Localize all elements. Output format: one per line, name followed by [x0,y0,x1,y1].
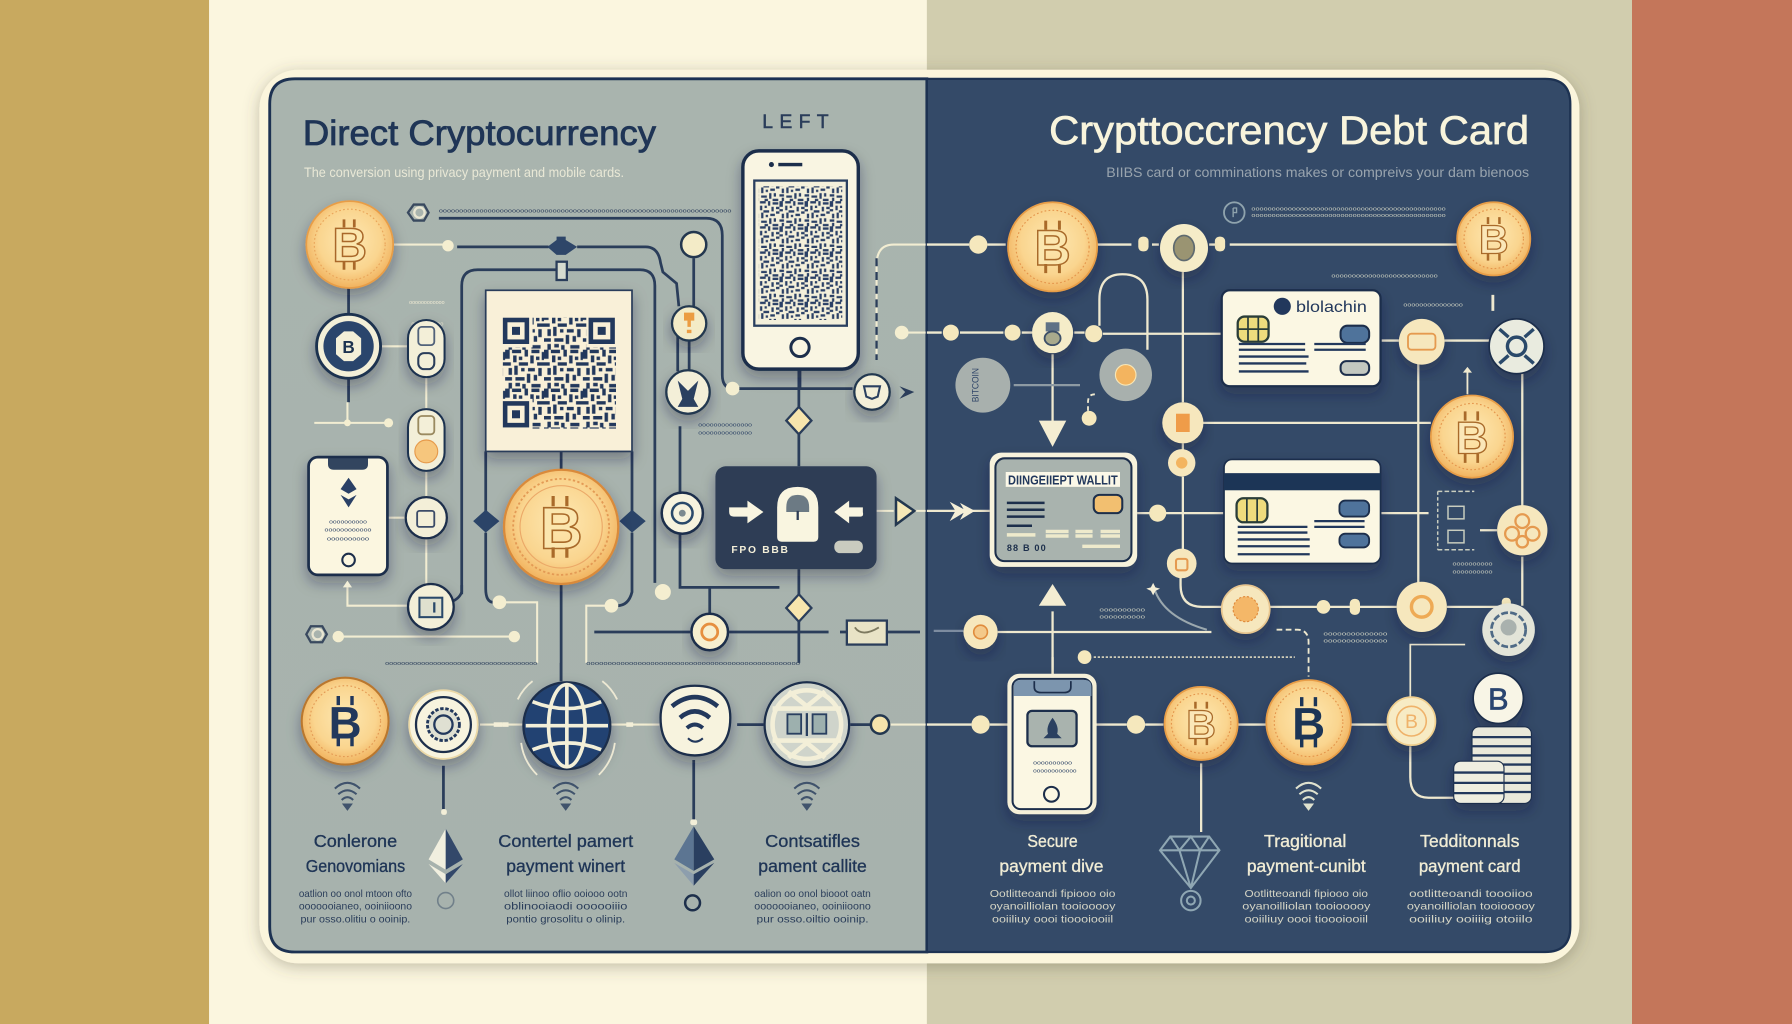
node: key circle [672,306,706,341]
connector lines left [349,218,920,821]
coin: top left bitcoin [306,201,393,288]
caption: secure: payment dive [999,856,1103,876]
caption: secure: ooiiliuy oooi tioooiooiil [992,914,1113,925]
note text near token [409,300,445,328]
node: coin stack icon [1032,312,1073,353]
coin: bottom left [302,678,389,765]
icon: ring label [1224,202,1245,223]
caption: column one: oatlion oo onol mtoon ofto [299,889,412,900]
caption: secure: Secure [1027,831,1078,851]
node: grey globe [1482,603,1535,656]
caption: column two: pontio grosolitu o olinip. [506,914,625,925]
icon: ethereum left [429,829,463,883]
caption: column one: pur osso.olitiu o ooinip. [301,914,410,925]
caption: column one: Genovomians [306,856,405,876]
caption: column three: oalion oo onol biooot oatn [754,889,871,900]
subtitle left: The conversion using privacy payment and mobile cards. [304,165,624,181]
caption: column three: pur osso.oiltio ooinip. [757,914,869,925]
gem node [547,237,577,255]
card: blockchain: blolachin [1296,299,1367,316]
coin: right mid [1431,395,1513,478]
arrow up into wallet [1039,584,1066,606]
coin: right top large [1008,202,1097,291]
arrow down into wallet [1039,421,1066,447]
dashed chip bracket [1438,491,1474,550]
coin: right bottom dark B [1266,680,1351,765]
small rings [438,893,700,910]
node: grey vertical label [955,358,1010,413]
small receipt box [847,621,887,645]
caption: column three: pament callite [758,856,867,876]
icon: navy token [317,314,381,378]
node: ring [662,493,703,534]
wifi icons left [335,783,819,809]
phone small left: oooooooooooo [325,527,372,533]
card: plain debit [1224,459,1381,563]
connector lines right [927,245,1522,832]
stem caps [441,809,697,825]
icon: navy token: B [342,337,355,357]
caption: column one [299,831,412,925]
caption: traditional card: Tedditonnals [1420,831,1519,851]
node: small coin [1168,449,1195,477]
icon: pill lower [408,409,445,471]
QR code large [486,290,632,451]
micro captions right: oooooooooooooo [1323,631,1387,637]
node: three rings [1497,505,1547,555]
micro note by lock card: oooooooooooooo [698,422,752,428]
coin: right top large: B [1034,219,1071,276]
phone: secure app [1009,675,1095,813]
diamonds beside central coin [473,510,646,533]
icon: wifi shield [661,686,730,755]
micro caption lower [385,661,800,667]
infographic card frame [259,70,1579,963]
connector tab [557,262,567,280]
coin: right top corner: B [1479,217,1509,263]
node: figure circle [666,370,710,414]
micro captions right [1099,206,1493,644]
wifi icon right [1296,783,1321,809]
icon: nut lower [306,626,327,642]
coin: right bottom pale: B [1186,701,1216,747]
icon: coin stacks: B [1488,682,1509,717]
node: grey vertical label: BITCOIN [970,368,980,402]
arrow triangle [896,498,914,525]
caption: traditional card [1407,831,1535,925]
icon: fingerprint circle [409,690,478,759]
caption: traditional wallet: ooiiliuy oooi tioooiooiil [1245,914,1368,925]
micro captions right: ooooooooooooooo [1403,302,1463,308]
caption: column three [754,831,871,925]
caption: traditional wallet [1242,831,1370,925]
caption: column one: ooooooianeo, ooiniioono [299,902,412,913]
node: pale coin [1387,697,1435,745]
micro captions right: oooooooooo [1453,570,1493,576]
caption: traditional wallet: Ootlitteoandi fipiooo oio [1245,889,1368,900]
heading: direct cryptocurrency: Direct Cryptocurrency [303,113,656,153]
card: blockchain [1222,290,1381,386]
arrow: up to phone [343,581,352,587]
icon: grid circle [765,682,849,767]
caption: column three: Contsatifles [765,831,860,851]
icon: nut top [408,205,429,221]
digital wallet card: 88 B 00 [1007,543,1047,553]
caption: column one: Conlerone [314,831,397,851]
icon: ethereum right [674,826,714,886]
phone: secure app: oooooooooo [1033,761,1072,767]
coin: central bitcoin: B [540,495,583,562]
note text near token: oooooooooo [411,322,443,328]
secure lock card: FPO BBB [731,545,790,556]
node: ring gold [1397,582,1447,632]
caption: secure [990,831,1116,925]
phone with QR [743,151,858,369]
coin: right bottom dark B: B [1292,698,1325,749]
digital wallet card [990,453,1137,567]
caption: column two [498,831,633,925]
icon: diamond pendant [1160,837,1219,910]
node: top chip [1160,224,1208,272]
node: right shield [854,374,890,410]
secure lock card [715,466,877,569]
coin: right mid: B [1455,413,1489,464]
icon: circle square [408,584,454,630]
micro caption lower: oooooooooooooooooooooooooooooooooooooooooooooooooo [586,661,800,667]
phone small left [309,457,387,575]
icon: globe [523,682,610,769]
micro captions right: oooooooooo [1099,607,1145,613]
panel: direct cryptocurrency [270,79,927,952]
arrow right top [899,386,914,399]
globe signal arcs [518,681,617,775]
note text near token: oooooooooooo [409,300,445,306]
caption: secure: oyanoilliolan tooiooooy [990,902,1116,913]
micro captions right: oooooooooo [1099,614,1145,620]
node: lower left coin [963,615,998,649]
caption: traditional wallet: payment-cunibt [1247,856,1366,876]
icon: coin stacks [1454,673,1531,803]
coin: right top corner [1457,202,1530,275]
caption: traditional card: ooiiliuy ooiiiig otoiilo [1409,914,1533,925]
node: orange tag [1162,402,1203,443]
tick mark [1491,295,1494,311]
dashes on bottom row [494,722,633,727]
caption: column two: Contertel pamert [498,831,633,851]
node: blueprint circle [1489,319,1544,374]
heading: debit card: Crypttoccrency Debt Card [1049,109,1529,153]
arrow: star pointer [1146,583,1160,595]
caption: column two: payment winert [506,856,625,876]
caption: traditional wallet: Tragitional [1264,831,1346,851]
icon: circle middle [406,497,447,538]
caption: secure: Ootlitteoandi fipiooo oio [990,889,1115,900]
diamonds on flow line [786,407,811,622]
arrow up small [1463,367,1472,373]
node: grey orange dot [1099,349,1152,401]
micro note by lock card [698,422,752,436]
node: orange coin [1222,585,1270,633]
digital wallet card: DIINGEIIEPT WALLIT [1008,474,1118,488]
coin: top left bitcoin: B [332,220,367,273]
node: small lock [1167,549,1197,578]
phone small left: oooooooooo [329,519,367,525]
node: orange ring [691,614,728,650]
micro captions right: oooooooooo [1453,562,1493,568]
arrow feather right [950,502,975,521]
coin: bottom left: B [329,697,362,748]
node: pale coin: B [1405,711,1418,733]
micro captions right: oooooooooooooo [1323,638,1387,644]
micro captions right: oooooooooooooooooooooooooo [1331,274,1438,280]
phone small left: oooooooooo [327,537,369,543]
icon: pill top [408,320,445,377]
panel: cryptocurrency debit card [927,79,1570,952]
caption: traditional card: ootlitteoandi toooiioo [1409,889,1533,900]
micro caption top: oooooooooooooooooooooooooooooooooooooooooooooooooooooooooooooooooooooooo [439,209,731,215]
caption: column three: ooooooianeo, ooiniioono [754,902,871,913]
node circle top [681,232,706,257]
caption: column two: oblinooiaodi oooooiiio [504,902,627,913]
node: gold dot [871,715,889,734]
micro caption lower: oooooooooooooooooooooooooooooooooooooo [385,661,537,667]
coin: right bottom pale [1165,687,1238,760]
bottom row icons [302,678,889,775]
micro captions right: oooooooooooooooooooooooooooooooooooooooooooooooo [1251,206,1446,212]
caption: traditional card: payment card [1419,856,1521,876]
coin: central bitcoin [504,470,618,584]
caption: traditional card: oyanoilliolan tooiooooy [1407,902,1535,913]
micro note by lock card: oooooooooooooo [698,430,752,436]
phone: secure app: oooooooooooo [1033,769,1077,775]
node: usd circle [1399,319,1445,365]
label: left: LEFT [762,111,829,133]
micro captions right: oooooooooooooooooooooooooooooooooooooooooooooooo [1251,213,1446,219]
caption: traditional wallet: oyanoilliolan tooiooooy [1242,902,1370,913]
subtitle right: BIIBS card or comminations makes or compreivs your dam bienoos [1106,165,1529,181]
caption: column two: ollot liinoo oflio ooiooo ootn [504,889,627,900]
